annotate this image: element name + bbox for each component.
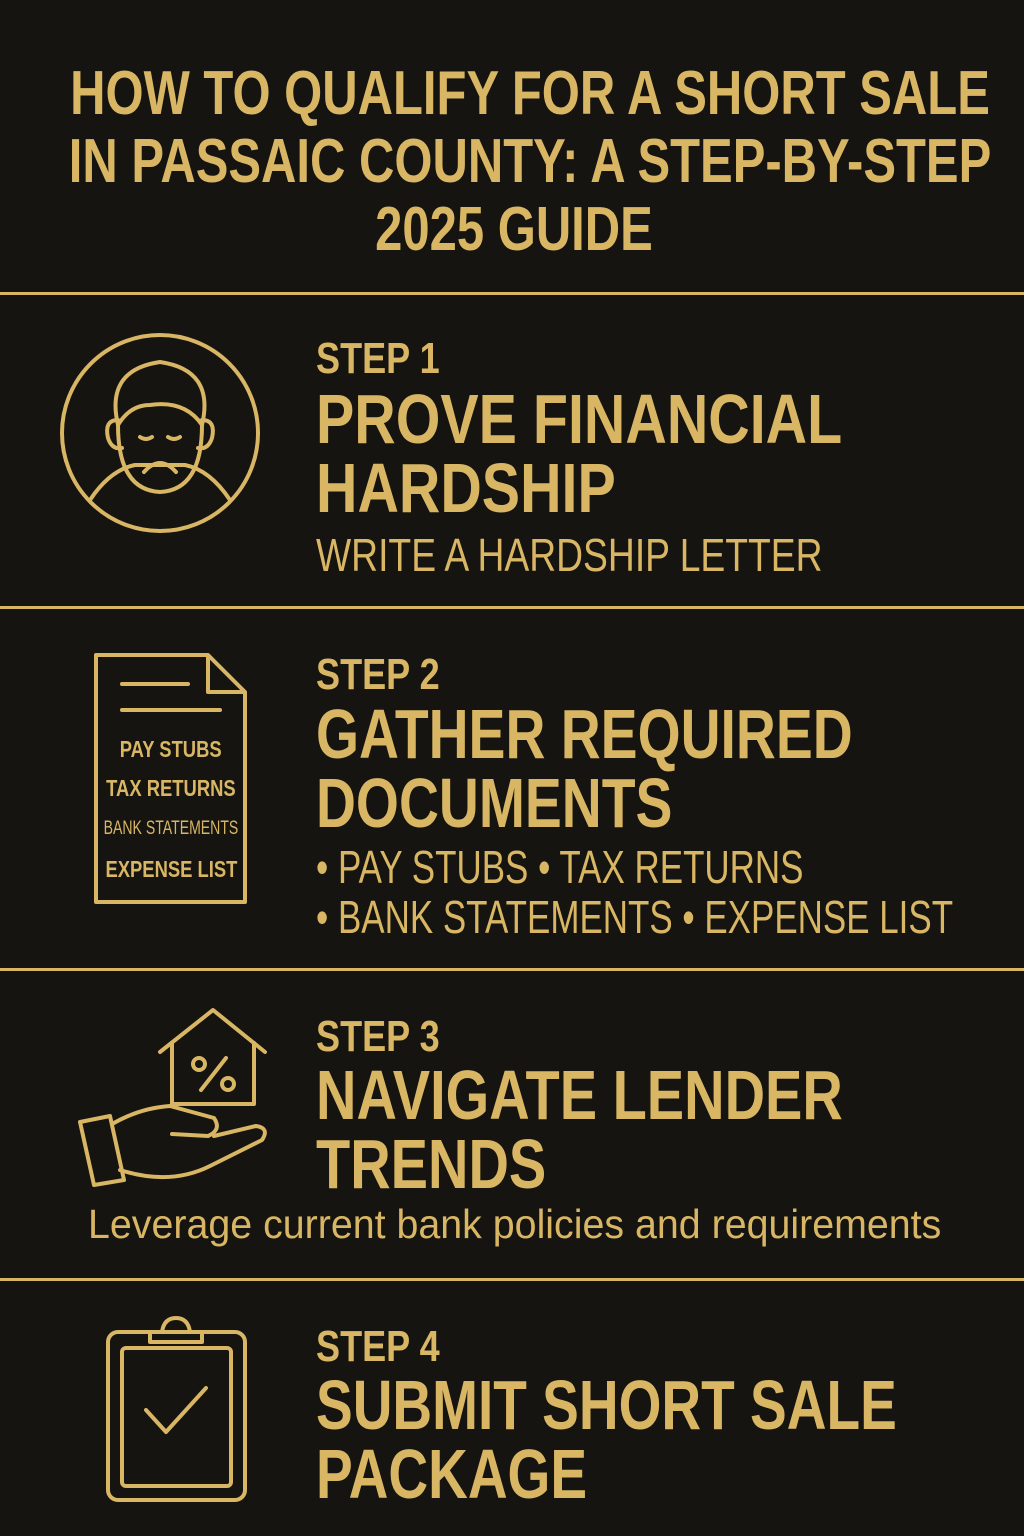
icon: document list: PAY STUBS xyxy=(120,736,222,762)
step 4 heading: PACKAGE xyxy=(316,1435,587,1513)
step 3 heading: TRENDS xyxy=(316,1125,546,1203)
icon: document list: EXPENSE LIST xyxy=(105,856,237,882)
step 3 text: Leverage current bank policies and requirements xyxy=(88,1201,941,1247)
icon: hand with house xyxy=(78,1008,268,1187)
step 2 label: STEP 2 xyxy=(316,650,440,699)
step 4 heading: SUBMIT SHORT SALE xyxy=(316,1366,897,1444)
step 1 heading xyxy=(316,380,842,527)
step 4 heading xyxy=(316,1366,897,1513)
icon: document list xyxy=(94,653,247,904)
icon: sad person xyxy=(60,333,260,533)
step 3 heading xyxy=(316,1056,843,1203)
title: HOW TO QUALIFY FOR A SHORT SALE xyxy=(70,59,990,128)
panel: step 3 xyxy=(78,1008,941,1247)
step 2 heading: DOCUMENTS xyxy=(316,764,672,842)
step 1 heading: HARDSHIP xyxy=(316,449,616,527)
panel: step 1 xyxy=(60,333,842,581)
step 2 bullets xyxy=(316,841,953,943)
title xyxy=(69,59,991,264)
step 2 bullets: • PAY STUBS • TAX RETURNS xyxy=(316,841,803,893)
panel: step 2 xyxy=(94,650,953,943)
step 3 label: STEP 3 xyxy=(316,1012,440,1061)
step 1 text: WRITE A HARDSHIP LETTER xyxy=(316,529,823,581)
title: IN PASSAIC COUNTY: A STEP-BY-STEP xyxy=(69,127,991,196)
step 2 heading: GATHER REQUIRED xyxy=(316,695,853,773)
icon: document list: BANK STATEMENTS xyxy=(104,818,238,839)
step 1 heading: PROVE FINANCIAL xyxy=(316,380,842,458)
title: 2025 GUIDE xyxy=(375,195,653,264)
step 2 heading xyxy=(316,695,853,842)
step 4 label: STEP 4 xyxy=(316,1322,440,1371)
step 2 bullets: • BANK STATEMENTS • EXPENSE LIST xyxy=(316,891,953,943)
icon: document list: TAX RETURNS xyxy=(106,775,236,801)
panel: step 4 xyxy=(106,1316,897,1513)
step 3 heading: NAVIGATE LENDER xyxy=(316,1056,843,1134)
step 1 label: STEP 1 xyxy=(316,334,440,383)
icon: clipboard check xyxy=(106,1316,247,1502)
